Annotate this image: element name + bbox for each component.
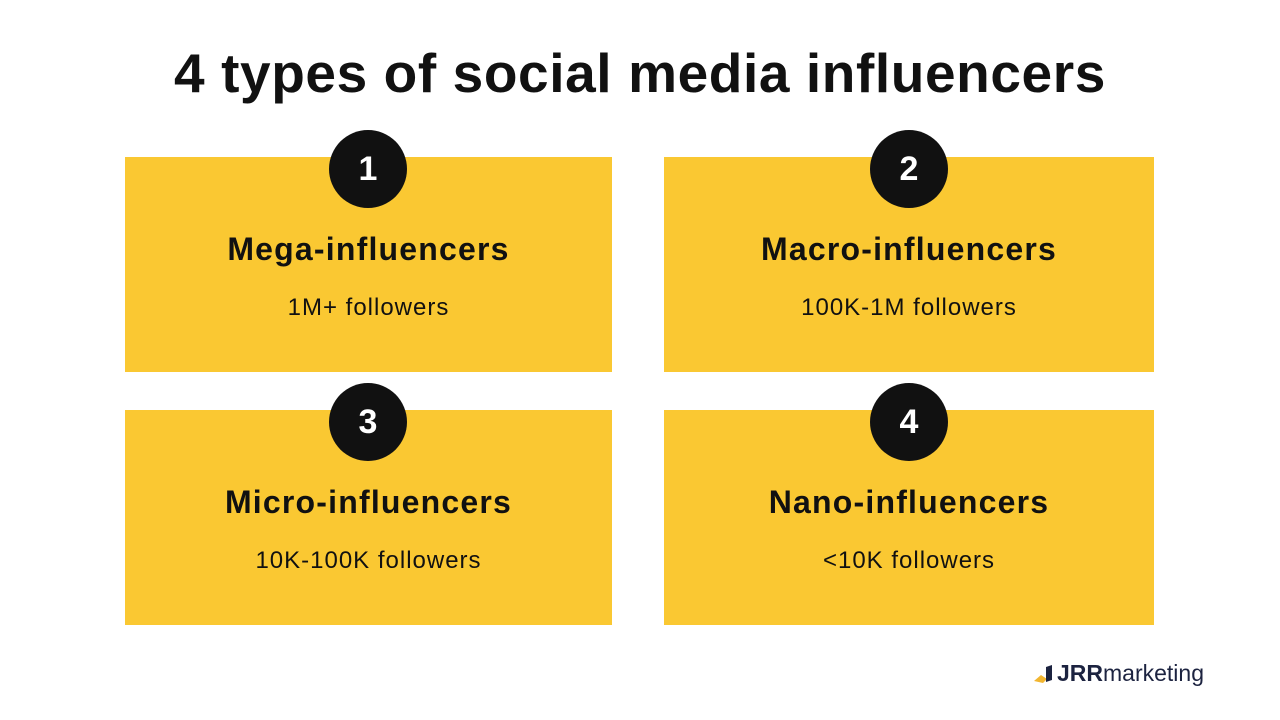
badge 1: [329, 130, 407, 208]
badge 3: 3: [359, 403, 377, 441]
panel: macro: [664, 157, 1154, 372]
badge 2: [870, 130, 948, 208]
heading macro: Macro-influencers: [761, 231, 1057, 267]
logo text: JRRmarketing: [1057, 660, 1204, 686]
text mega: 1M+ followers: [288, 294, 449, 321]
icon: logo mark: [1034, 665, 1052, 683]
logo: [1034, 660, 1204, 686]
heading mega: Mega-influencers: [227, 231, 510, 267]
text nano: <10K followers: [823, 547, 995, 574]
badge 1: 1: [359, 150, 377, 188]
badge 2: 2: [900, 150, 918, 188]
heading micro: Micro-influencers: [225, 484, 512, 520]
panel: micro: [125, 410, 612, 625]
panel: mega: [125, 157, 612, 372]
badge 4: 4: [900, 403, 918, 441]
text macro: 100K-1M followers: [801, 294, 1017, 321]
panel: nano: [664, 410, 1154, 625]
title: 4 types of social media influencers: [174, 42, 1106, 104]
badge 3: [329, 383, 407, 461]
text micro: 10K-100K followers: [255, 547, 482, 574]
heading nano: Nano-influencers: [769, 484, 1049, 520]
badge 4: [870, 383, 948, 461]
